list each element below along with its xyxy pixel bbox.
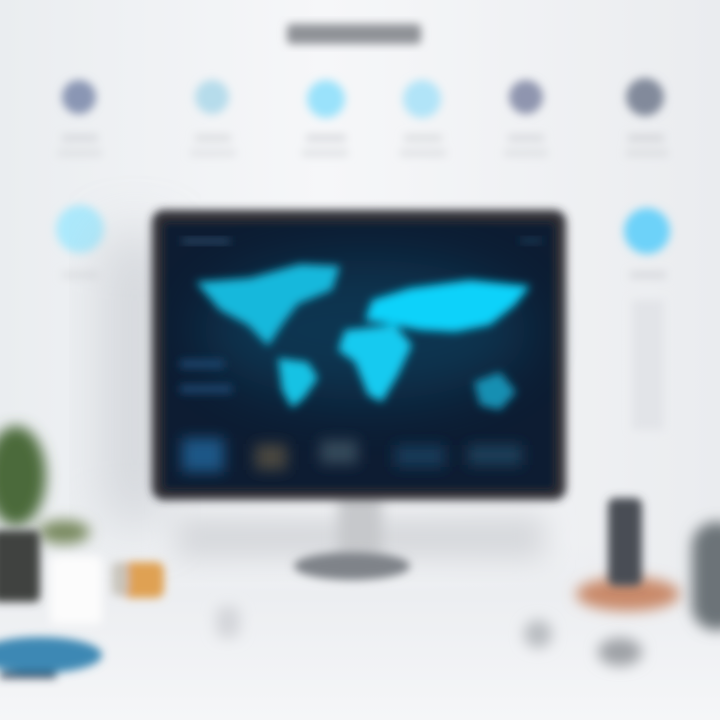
monitor shadow bbox=[105, 235, 165, 525]
white mug bbox=[50, 556, 102, 624]
orange object bbox=[112, 562, 164, 598]
icon: card 2 bbox=[190, 80, 236, 156]
desk organizer bbox=[576, 498, 680, 611]
wooden tray bbox=[576, 577, 680, 611]
monitor screen bbox=[164, 223, 554, 489]
plant leaves bbox=[0, 426, 90, 544]
bottom stat row bbox=[182, 438, 522, 472]
desk surface bbox=[0, 540, 720, 720]
plant bbox=[0, 426, 90, 602]
map: south america bbox=[278, 358, 318, 408]
dark holder bbox=[608, 498, 642, 586]
blue notebook bbox=[0, 637, 102, 678]
monitor bbox=[152, 210, 566, 580]
map: africa bbox=[338, 325, 412, 402]
map: eurasia bbox=[365, 280, 530, 332]
left chart column bbox=[180, 360, 232, 393]
monitor bezel bbox=[152, 210, 566, 500]
icon: card 5 bbox=[504, 80, 548, 156]
map: north america bbox=[196, 264, 340, 346]
monitor stand bbox=[175, 495, 545, 580]
plant pot bbox=[0, 530, 40, 602]
heading bbox=[287, 24, 421, 44]
right dark object bbox=[692, 522, 720, 630]
world map bbox=[196, 264, 530, 410]
side icon: right bbox=[624, 208, 670, 430]
icon: card 1 bbox=[58, 80, 102, 156]
map: australia bbox=[474, 372, 516, 410]
dashboard header text bbox=[182, 238, 542, 244]
icon: card 6 bbox=[626, 78, 668, 156]
icon: card 3 bbox=[302, 80, 348, 156]
desk accessories bbox=[216, 606, 642, 666]
side icon: left bbox=[56, 205, 104, 278]
icon: card 4 bbox=[400, 80, 446, 156]
map glow bbox=[200, 260, 530, 400]
top icon row bbox=[58, 78, 668, 156]
